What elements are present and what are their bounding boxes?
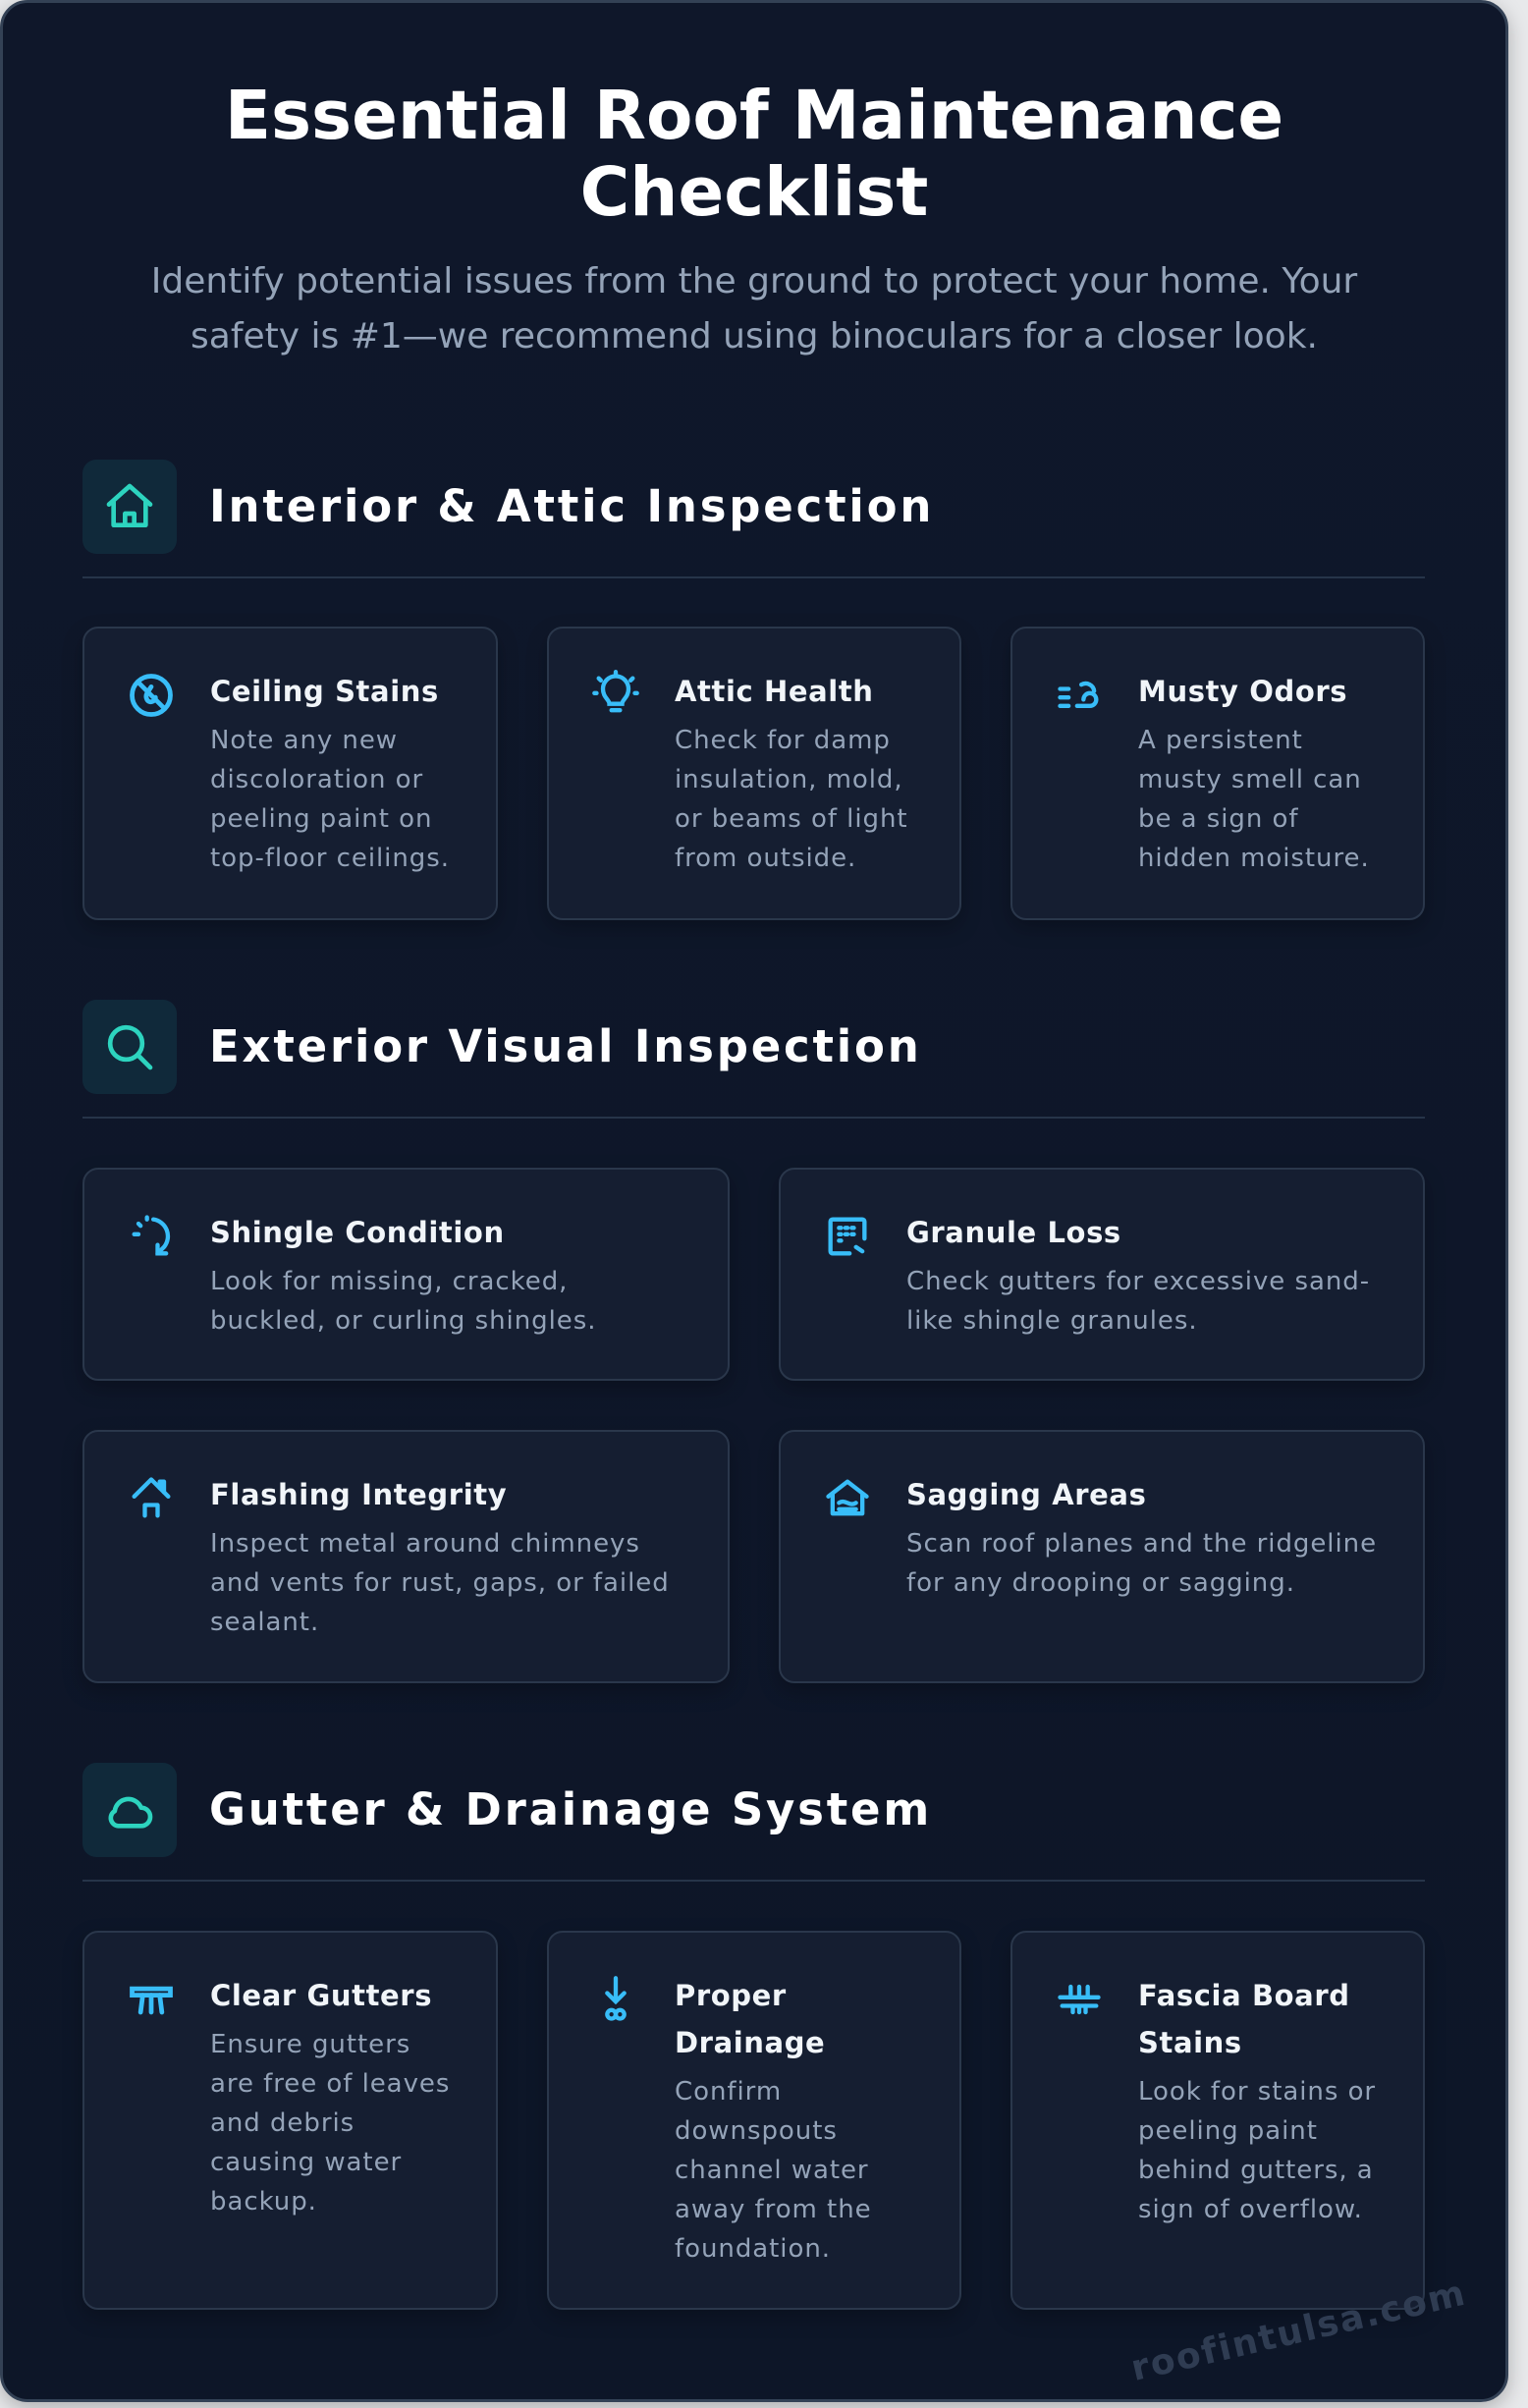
icon: gutter (130, 1986, 173, 2015)
card: shingle condition: Shingle Condition (210, 1216, 505, 1249)
card: attic health (547, 627, 961, 920)
card: flashing integrity: Flashing Integrity (210, 1478, 507, 1511)
icon: roof chimney (132, 1477, 171, 1518)
card: shingle condition (82, 1168, 730, 1381)
card: proper drainage: Confirm downspouts channel water away from the foundation. (675, 2077, 872, 2264)
card: musty odors: A persistent musty smell can be a sign of hidden moisture. (1138, 726, 1370, 873)
card: ceiling stains: Ceiling Stains (210, 675, 439, 708)
section header: gutter (82, 1763, 1425, 1882)
card: attic health: Check for damp insulation, mold, or beams of light from outside. (675, 726, 908, 873)
section header: interior (82, 460, 1425, 578)
title: Checklist (580, 153, 928, 232)
card: musty odors: Musty Odors (1138, 675, 1347, 708)
card: proper drainage (547, 1931, 961, 2310)
card: sagging areas (779, 1430, 1425, 1683)
card: fascia board stains (1010, 1931, 1425, 2310)
icon: bulb (592, 670, 639, 713)
icon: cloud (82, 1763, 177, 1857)
card: fascia board stains: Fascia Board Stains (1138, 1979, 1350, 2059)
card: granule loss: Check gutters for excessive sand-like shingle granules. (906, 1267, 1370, 1336)
card: clear gutters: Ensure gutters are free of leaves and debris causing water backup. (210, 2030, 450, 2216)
card: clear gutters (82, 1931, 498, 2310)
icon: arrow down (605, 1976, 627, 2021)
card: flashing integrity: Inspect metal around chimneys and vents for rust, gaps, or failed sealant. (210, 1529, 670, 1637)
card: musty odors (1010, 627, 1425, 920)
card: proper drainage: Proper Drainage (675, 1979, 825, 2059)
title: Essential Roof Maintenance (225, 77, 1283, 155)
title (225, 77, 1283, 232)
icon: wind (1058, 682, 1098, 708)
icon: fascia (1058, 1984, 1101, 2015)
section header: exterior (82, 1000, 1425, 1119)
card: shingle condition: Look for missing, cracked, buckled, or curling shingles. (210, 1267, 596, 1336)
heading: Interior & Attic Inspection (209, 480, 934, 532)
card: fascia board stains: Look for stains or peeling paint behind gutters, a sign of overflow. (1138, 2077, 1376, 2224)
card: attic health: Attic Health (675, 675, 874, 708)
icon: rotate dashed (132, 1215, 171, 1255)
icon: sagging house (826, 1479, 869, 1516)
card: ceiling stains: Note any new discoloration or peeling paint on top-floor ceilings. (210, 726, 450, 873)
card: sagging areas: Scan roof planes and the ridgeline for any drooping or sagging. (906, 1529, 1377, 1598)
watermark: roofintulsa.com (1127, 2272, 1470, 2389)
card: granule loss (779, 1168, 1425, 1381)
card: sagging areas: Sagging Areas (906, 1478, 1146, 1511)
icon: grid (829, 1218, 866, 1255)
heading: Exterior Visual Inspection (209, 1020, 922, 1072)
card: flashing integrity (82, 1430, 730, 1683)
icon: house (82, 460, 177, 554)
card: granule loss: Granule Loss (906, 1216, 1121, 1249)
icon: no-stain (130, 674, 173, 717)
heading: Gutter & Drainage System (209, 1783, 932, 1835)
card: clear gutters: Clear Gutters (210, 1979, 432, 2012)
icon: search (82, 1000, 177, 1094)
card: ceiling stains (82, 627, 498, 920)
subtitle: Identify potential issues from the ground to protect your home. Your safety is #1—we recommend using binoculars for a closer look. (151, 261, 1357, 356)
